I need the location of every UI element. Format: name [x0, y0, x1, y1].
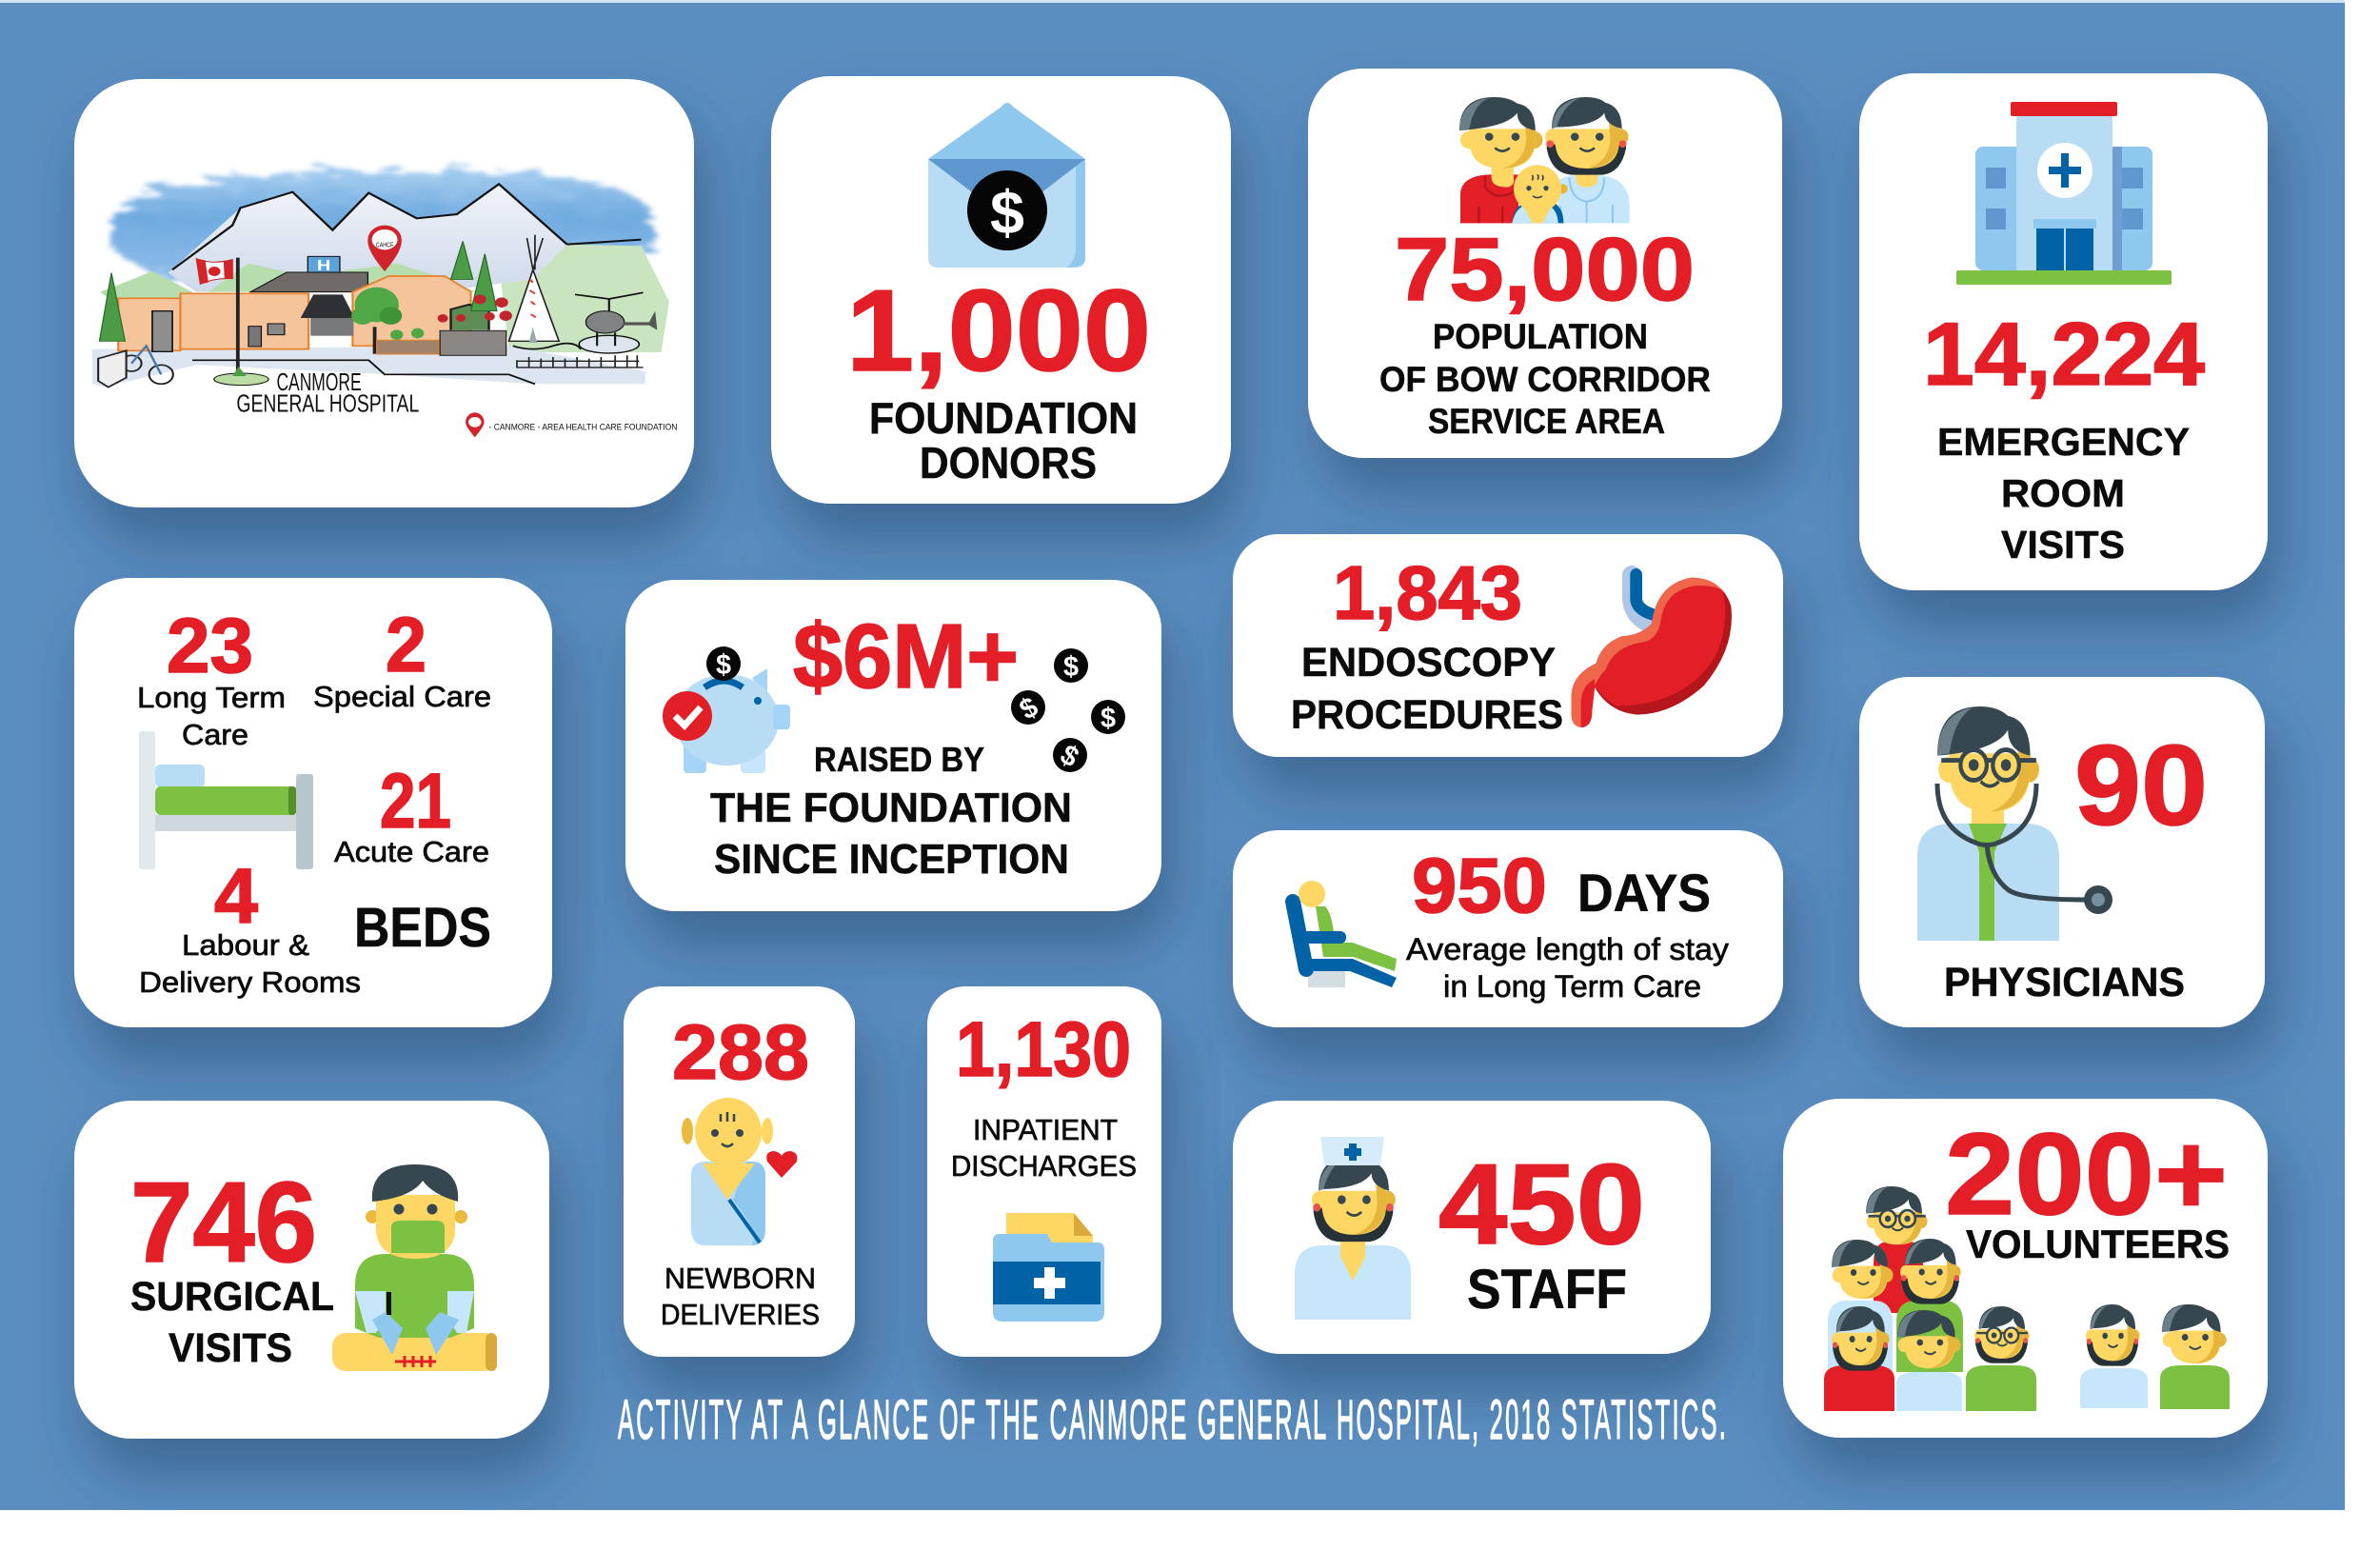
icon: doctor with stethoscope	[1917, 706, 2112, 941]
label: surgical visits: SURGICAL	[130, 1274, 334, 1320]
illustration: Canmore General Hospital: CANMORE	[276, 368, 362, 396]
illustration: Canmore General Hospital: - CANMORE - AREA HEALTH CARE FOUNDATION	[489, 423, 677, 432]
illustration: Canmore General Hospital: H	[317, 257, 330, 273]
label: population of Bow Corridor service area: OF BOW CORRIDOR	[1379, 360, 1711, 399]
icon: patient chair	[1293, 881, 1397, 987]
icon: baby with heart	[682, 1098, 797, 1245]
icon: nurse	[1295, 1137, 1411, 1320]
stat: 23 long term care: 23	[167, 603, 253, 689]
stat: 950 days: DAYS	[1577, 863, 1711, 923]
icon: medical folder	[993, 1213, 1104, 1322]
label: emergency room visits	[1937, 420, 2190, 567]
panel: funds raised	[625, 580, 1161, 911]
label: surgical visits	[130, 1274, 334, 1371]
icon: dollar coins: $	[1015, 691, 1043, 726]
stat: $6M+: $6M+	[793, 606, 1019, 707]
stat: 2 special care: Special Care	[313, 680, 491, 713]
stat: 2 special care	[313, 602, 491, 713]
label: foundation donors	[869, 393, 1138, 487]
label: newborn deliveries: DELIVERIES	[661, 1298, 820, 1331]
stat: 23 long term care	[137, 603, 286, 751]
icon: group of volunteers	[1824, 1186, 2230, 1411]
label: newborn deliveries	[661, 1262, 820, 1331]
stat: 23 long term care: Care	[182, 718, 248, 751]
label: emergency room visits: ROOM	[2001, 471, 2125, 515]
label: newborn deliveries: NEWBORN	[664, 1262, 816, 1295]
label: population of Bow Corridor service area	[1379, 317, 1711, 441]
label: raised by the foundation since inception: SINCE INCEPTION	[714, 836, 1069, 883]
icon: dollar coins: $	[1063, 651, 1079, 683]
illustration: Canmore General Hospital: CAHCF	[376, 240, 393, 249]
stat: 75,000: 75,000	[1395, 219, 1695, 319]
panel: foundation donors	[771, 76, 1231, 504]
label: surgical visits: VISITS	[169, 1325, 292, 1371]
illustration: Canmore General Hospital: GENERAL HOSPITAL	[236, 389, 419, 417]
panel: emergency room visits	[1859, 73, 2268, 590]
icon: hospital building	[1956, 102, 2172, 285]
label: inpatient discharges: INPATIENT	[973, 1113, 1118, 1146]
stat: 1,000: 1,000	[846, 266, 1151, 395]
stat: 746: 746	[130, 1159, 317, 1286]
icon: hospital bed	[139, 731, 313, 869]
stat: 950 days: 950	[1412, 843, 1547, 929]
panel: endoscopy procedures	[1233, 534, 1783, 757]
panel: beds	[74, 578, 552, 1027]
panel: inpatient discharges	[927, 986, 1161, 1357]
label: average length of stay: Average length of stay	[1406, 932, 1729, 966]
panel: average stay	[1233, 830, 1783, 1027]
label: beds: BEDS	[354, 897, 491, 959]
stat: 950 days	[1412, 843, 1711, 929]
stat: 90: 90	[2074, 722, 2208, 849]
stat: 2 special care: 2	[386, 602, 426, 688]
stat: 1,843: 1,843	[1333, 550, 1522, 635]
label: endoscopy procedures: ENDOSCOPY	[1301, 640, 1556, 686]
icon: piggy bank	[663, 646, 790, 773]
stat: 21 acute care	[334, 758, 489, 868]
panel: newborn deliveries	[624, 986, 855, 1357]
label: inpatient discharges	[951, 1113, 1137, 1183]
caption: ACTIVITY AT A GLANCE OF THE CANMORE GENERAL HOSPITAL, 2018 STATISTICS.	[618, 1389, 1726, 1451]
icon: piggy bank: $	[716, 649, 731, 681]
label: emergency room visits: EMERGENCY	[1937, 420, 2190, 464]
label: physicians: PHYSICIANS	[1944, 960, 2185, 1005]
panel: population	[1308, 69, 1782, 458]
icon: envelope with dollar coin: $	[990, 178, 1024, 247]
label: endoscopy procedures	[1291, 640, 1563, 738]
panel: surgical visits	[74, 1101, 549, 1439]
icon: envelope with dollar coin	[928, 103, 1085, 268]
icon: stomach	[1572, 574, 1732, 727]
label: endoscopy procedures: PROCEDURES	[1291, 692, 1563, 738]
stat: 1,130: 1,130	[956, 1006, 1131, 1093]
label: population of Bow Corridor service area: POPULATION	[1433, 317, 1648, 356]
stat: 4 labour and delivery rooms: Delivery Rooms	[139, 965, 361, 999]
label: staff: STAFF	[1467, 1259, 1627, 1321]
icon: dollar coins	[1011, 648, 1125, 774]
label: population of Bow Corridor service area: SERVICE AREA	[1428, 402, 1665, 441]
label: average length of stay	[1406, 932, 1729, 1004]
label: raised by the foundation since inception: RAISED BY	[814, 740, 984, 779]
icon: dollar coins: $	[1101, 703, 1116, 734]
stat: 200+: 200+	[1945, 1109, 2228, 1239]
stat: 21 acute care: 21	[380, 758, 451, 845]
panel: staff	[1233, 1101, 1711, 1354]
icon: dollar coins: $	[1055, 739, 1084, 774]
label: raised by the foundation since inception	[710, 740, 1072, 883]
stat: 4 labour and delivery rooms: 4	[214, 853, 258, 940]
stat: 288: 288	[672, 1009, 809, 1096]
stat: 21 acute care: Acute Care	[334, 835, 489, 868]
label: volunteers: VOLUNTEERS	[1966, 1222, 2230, 1266]
stat: 4 labour and delivery rooms: Labour &	[182, 928, 309, 962]
stat: 14,224: 14,224	[1923, 304, 2205, 404]
illustration: Canmore General Hospital	[92, 170, 677, 437]
stat: 4 labour and delivery rooms	[139, 853, 361, 999]
panel: volunteers	[1783, 1099, 2268, 1438]
stat: 23 long term care: Long Term	[137, 681, 286, 714]
icon: surgeon	[332, 1164, 497, 1371]
panel: hospital illustration	[74, 79, 694, 507]
label: average length of stay: in Long Term Care	[1443, 969, 1701, 1004]
panel: physicians	[1859, 677, 2265, 1027]
label: foundation donors: DONORS	[920, 438, 1097, 487]
label: raised by the foundation since inception: THE FOUNDATION	[710, 785, 1072, 831]
label: emergency room visits: VISITS	[2001, 523, 2125, 567]
label: foundation donors: FOUNDATION	[869, 393, 1138, 443]
label: inpatient discharges: DISCHARGES	[951, 1149, 1137, 1183]
stat: 450: 450	[1438, 1141, 1645, 1268]
icon: family	[1459, 97, 1630, 223]
